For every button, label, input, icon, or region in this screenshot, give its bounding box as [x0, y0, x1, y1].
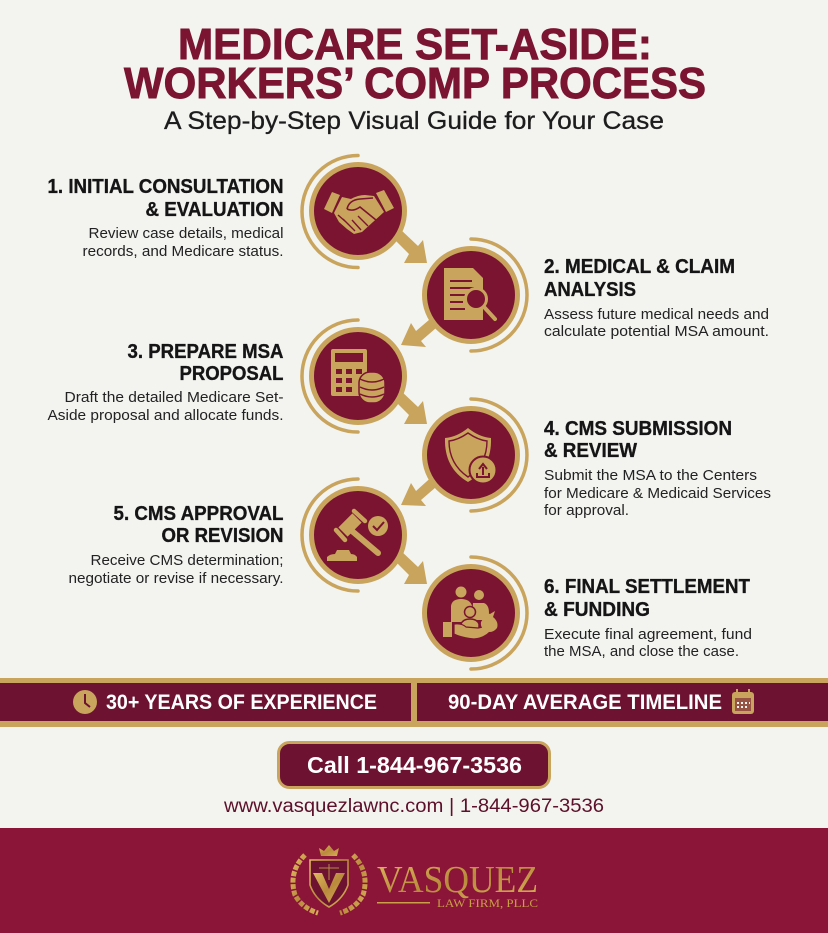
arrow: step 3 to 4 — [392, 390, 427, 424]
title — [124, 20, 706, 108]
step 2 text: calculate potential MSA amount. — [544, 324, 769, 340]
step 5 text — [68, 503, 284, 587]
step 4 text: for Medicare & Medicaid Services — [544, 486, 771, 502]
step 6 text: & FUNDING — [544, 599, 650, 621]
logo — [293, 845, 538, 913]
step 1 text: records, and Medicare status. — [82, 244, 284, 260]
step 5 text: OR REVISION — [162, 525, 284, 547]
call button: Call 1-844-967-3536 — [307, 752, 522, 778]
step 4 badge — [424, 399, 527, 511]
step 5 badge — [302, 479, 404, 591]
step 6 text: Execute final agreement, fund — [544, 627, 752, 643]
subtitle: A Step-by-Step Visual Guide for Your Case — [164, 107, 664, 135]
step 1 text: 1. INITIAL CONSULTATION — [48, 176, 284, 198]
arrow: step 2 to 3 — [401, 314, 443, 347]
step 6 text: the MSA, and close the case. — [544, 644, 739, 660]
step 5 — [68, 479, 404, 591]
step 4 text — [544, 418, 771, 519]
step 4 text: & REVIEW — [544, 440, 637, 462]
stat: experience: 30+ YEARS OF EXPERIENCE — [106, 691, 377, 714]
title: WORKERS’ COMP PROCESS — [124, 59, 706, 108]
arrow: step 4 to 5 — [401, 473, 443, 506]
step 2 badge — [424, 239, 527, 351]
step 4 — [424, 399, 771, 519]
logo tagline: LAW FIRM, PLLC — [437, 896, 538, 910]
step 4 text: Submit the MSA to the Centers — [544, 468, 757, 484]
step 6 — [424, 557, 752, 669]
website and phone: www.vasquezlawnc.com | 1-844-967-3536 — [223, 796, 604, 817]
stat: timeline: 90-DAY AVERAGE TIMELINE — [448, 691, 722, 714]
step 1 text — [48, 176, 284, 260]
icon: handshake — [324, 190, 394, 234]
step 3 text: 3. PREPARE MSA — [128, 341, 284, 363]
step 5 text: Receive CMS determination; — [90, 553, 284, 569]
step 3 text — [48, 341, 284, 424]
call button — [278, 742, 550, 788]
icon: family and money bag in hand — [443, 586, 498, 639]
arrow: step 5 to 6 — [392, 550, 427, 584]
arrow: step 1 to 2 — [392, 229, 427, 263]
footer band — [0, 828, 828, 933]
step 2 text — [544, 256, 769, 340]
title: MEDICARE SET-ASIDE: — [178, 20, 652, 69]
step 2 text: Assess future medical needs and — [544, 307, 769, 323]
step 3 text: PROPOSAL — [180, 363, 284, 385]
step 6 badge — [424, 557, 527, 669]
step 5 text: 5. CMS APPROVAL — [114, 503, 284, 525]
step 5 text: negotiate or revise if necessary. — [68, 571, 284, 587]
step 1 text: Review case details, medical — [88, 226, 284, 242]
step 3 — [48, 320, 404, 432]
step 2 text: ANALYSIS — [544, 279, 636, 301]
step 3 text: Aside proposal and allocate funds. — [48, 408, 284, 424]
step 1 text: & EVALUATION — [146, 199, 284, 221]
icon: calendar — [732, 689, 754, 714]
icon: shield with upload — [445, 428, 496, 484]
icon: document with magnifier — [444, 268, 495, 320]
logo crest — [293, 845, 365, 913]
icon: clock — [73, 690, 97, 714]
step 2 — [424, 239, 769, 351]
step 4 text: for approval. — [544, 503, 629, 519]
icon: calculator and coins — [331, 349, 385, 403]
step 2 text: 2. MEDICAL & CLAIM — [544, 256, 735, 278]
step 3 badge — [302, 320, 404, 432]
step 6 text: 6. FINAL SETTLEMENT — [544, 576, 750, 598]
stats banner — [0, 678, 828, 727]
step 3 text: Draft the detailed Medicare Set- — [64, 390, 284, 406]
icon: gavel with check — [327, 511, 388, 561]
step 6 text — [544, 576, 752, 660]
step 4 text: 4. CMS SUBMISSION — [544, 418, 732, 440]
logo wordmark: VASQUEZ — [377, 859, 538, 901]
step 1 — [48, 156, 404, 268]
step 1 badge — [302, 156, 404, 268]
